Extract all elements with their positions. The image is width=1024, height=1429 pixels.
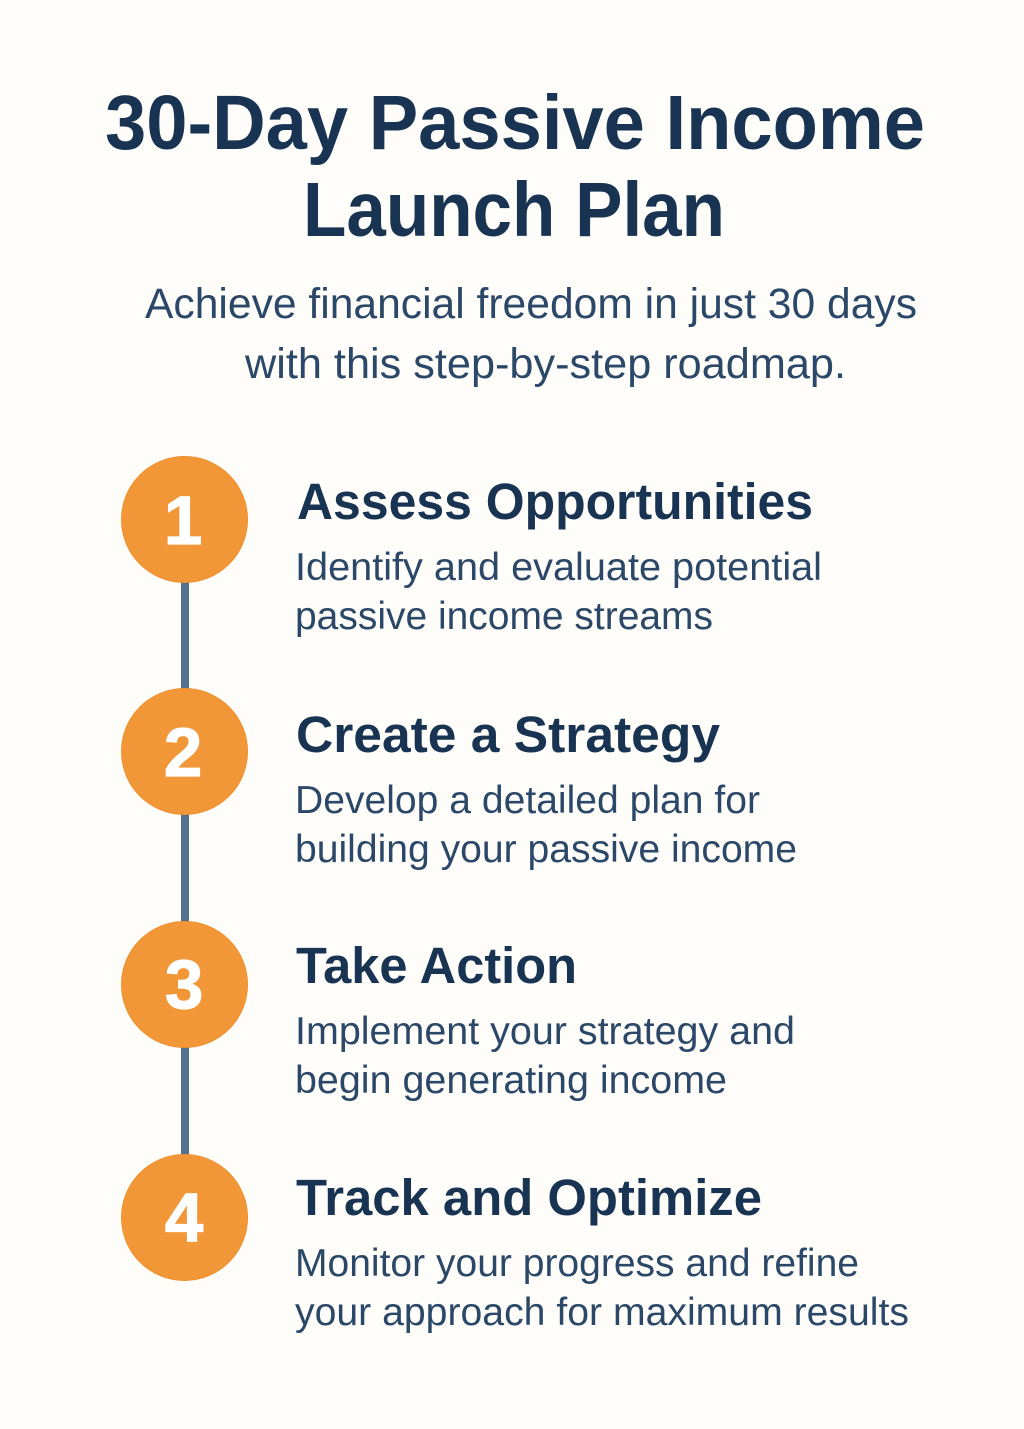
step 2 description	[295, 779, 797, 871]
step 2	[122, 688, 797, 871]
step 3 description: begin generating income	[295, 1059, 727, 1102]
subtitle	[145, 280, 917, 388]
step 2 description: Develop a detailed plan for	[295, 779, 760, 822]
subtitle: with this step-by-step roadmap.	[244, 340, 846, 388]
step 3 number badge	[122, 922, 248, 1048]
subtitle: Achieve financial freedom in just 30 days	[145, 280, 917, 328]
step 1 description	[295, 546, 822, 638]
title: Launch Plan	[303, 167, 725, 253]
title: 30-Day Passive Income	[105, 80, 925, 166]
step 3 description	[295, 1010, 795, 1102]
step 4 description	[295, 1242, 909, 1334]
step 1 description: passive income streams	[295, 595, 713, 638]
step 3 description: Implement your strategy and	[295, 1010, 795, 1053]
step 3 number badge: 3	[165, 946, 203, 1023]
step 1 number badge: 1	[164, 482, 202, 559]
step 1 heading: Assess Opportunities	[297, 473, 813, 530]
step 2 heading: Create a Strategy	[296, 706, 721, 763]
step 3 heading: Take Action	[296, 937, 577, 994]
step 1	[122, 456, 822, 638]
step 4 description: Monitor your progress and refine	[295, 1242, 859, 1285]
step 4 description: your approach for maximum results	[295, 1291, 909, 1334]
timeline connector 3	[181, 1044, 189, 1158]
step 3	[122, 922, 795, 1102]
timeline connector 2	[181, 812, 189, 924]
step 1 number badge	[122, 456, 248, 582]
step 4 number badge: 4	[165, 1179, 203, 1256]
step 2 number badge: 2	[164, 714, 202, 791]
title	[105, 80, 925, 253]
step 2 description: building your passive income	[295, 828, 797, 871]
step 4	[122, 1154, 909, 1334]
step 2 number badge	[122, 688, 248, 814]
step 4 number badge	[122, 1154, 248, 1280]
step 1 description: Identify and evaluate potential	[295, 546, 822, 589]
timeline connector 1	[181, 580, 189, 692]
step 4 heading: Track and Optimize	[296, 1169, 762, 1226]
